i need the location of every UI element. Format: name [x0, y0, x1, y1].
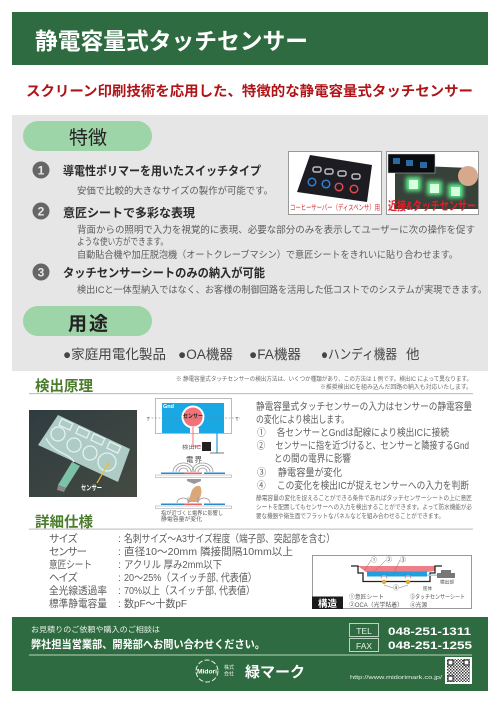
title banner [12, 12, 488, 65]
photo: proximity touch sensor [386, 152, 478, 214]
text block: detection principle note: 要な機器や衛生面でフラットなパネルなどを組み合わせることができます。 [256, 511, 444, 520]
feature 1: 導電性ポリマーを用いたスイッチタイプ [63, 163, 261, 178]
text block: detection principle: の変化により検出します。 [256, 413, 349, 426]
heading: features: 特徴 [69, 127, 107, 149]
note: ※推奨検出ICを組み込んだ回路の納入も対応いたします。 [320, 383, 472, 391]
feature 2: 自動貼合機や加圧脱泡機（オートクレーブマシン）で意匠シートをきれいに貼り合わせます。 [77, 249, 458, 261]
photo: film touch sensor: センサー [81, 484, 102, 492]
text block: detection principle: ③ 静電容量が変化 [257, 466, 342, 479]
feature 2: 意匠シートで多彩な表現 [63, 205, 195, 220]
feature 1 [32, 162, 273, 197]
footer: company logo: 株式 [224, 664, 234, 671]
text block: detection principle: ④ この変化を検出ICが捉えセンサーへの入力を判断 [257, 479, 469, 492]
diagram: finger near sensor: 指が近づくと電界に影響し [161, 509, 223, 517]
spec table: センサー [49, 546, 87, 558]
text block: detection principle: 静電容量式タッチセンサーの入力はセンサーの静電容量 [256, 400, 472, 413]
structure diagram: ③タッチセンサーシート [410, 593, 465, 601]
applications list: ●FA機器 [249, 347, 301, 362]
text block: detection principle [256, 400, 472, 492]
structure diagram: ①意匠シート [349, 593, 384, 601]
diagram: finger near sensor: 静電容量が変化 [161, 515, 203, 523]
structure diagram: ②OCA（光学粘着） [349, 601, 403, 609]
text block: detection principle note: 静電容量の変化を捉えることができる条件であればタッチセンサーシートの上に意匠 [256, 493, 472, 502]
text block: detection principle: との間の電界に影響 [274, 452, 351, 465]
structure diagram: ④ [393, 584, 399, 592]
spec table: 70%以上（スイッチ部, 代表値） [124, 584, 255, 597]
diagram: detection electrode layout: 検出IC [182, 444, 201, 451]
diagram: detection electrode layout: T [235, 417, 239, 423]
spec table: 直径10～20mm 隣接間隔10mm以上 [124, 545, 293, 558]
feature 3: タッチセンサーシートのみの納入が可能 [63, 265, 265, 280]
structure diagram: ③ [400, 556, 406, 564]
spec table: サイズ [49, 532, 78, 545]
footer: contact: 弊社担当営業部、開発部へお問い合わせください。 [31, 637, 265, 651]
subtitle: スクリーン印刷技術を応用した、特徴的な静電容量式タッチセンサー [26, 82, 473, 100]
spec table: アクリル 厚み2mm以下 [124, 559, 222, 571]
spec table: 全光線透過率 [49, 584, 107, 597]
footer: company logo: Midori [197, 668, 217, 676]
applications list: ●OA機器 [178, 347, 233, 362]
feature 3: 3 [38, 266, 45, 280]
footer: contact: お見積りのご依頼や購入のご相談は [31, 624, 161, 634]
footer: website url: http://www.midorimark.co.jp/ [350, 675, 442, 681]
feature 1: 安価で比較的大きなサイズの製作が可能です。 [77, 185, 273, 197]
title banner: 静電容量式タッチセンサー [35, 28, 308, 54]
feature 2: 2 [38, 204, 45, 218]
diagram: detection electrode layout: T [146, 417, 150, 423]
feature 2 [32, 202, 475, 261]
spec table: : [118, 533, 121, 545]
diagram: detection electrode layout: センサー [183, 413, 203, 420]
text block: detection principle: ① 各センサーとGndは配線により検出ICに接続 [257, 426, 449, 439]
applications list: ●家庭用電化製品 [63, 346, 166, 362]
photo: coffee server sensor panel: コーヒーサーバー（ディスペンサ）用 [290, 202, 380, 212]
structure diagram: 検出部 [440, 578, 455, 586]
structure diagram: ① [371, 556, 377, 564]
applications list: ●ハンディ機器 [321, 346, 397, 362]
footer: contact [12, 617, 488, 691]
note [176, 375, 472, 391]
feature 3: 検出ICと一体型納入ではなく、お客様の制御回路を活用した低コストでのシステムが実現できます。 [77, 284, 487, 296]
structure diagram: ② [386, 556, 392, 564]
footer: contact: TEL [356, 626, 372, 636]
structure diagram: 筐体 [423, 585, 432, 592]
feature 2: 背面からの照明で入力を視覚的に表現、必要な部分のみを表示してユーザーに次の操作を促す [77, 224, 475, 236]
spec table: 名刺サイズ～A3サイズ程度（端子部、突起部を含む） [124, 532, 335, 545]
diagram: electric field [156, 455, 232, 478]
feature 2: ような使い方ができます。 [77, 236, 168, 248]
diagram: detection electrode layout [146, 398, 240, 453]
spec table: : [118, 572, 121, 584]
feature 1: 1 [38, 164, 45, 178]
arrow: down [187, 479, 201, 484]
diagram: detection electrode layout: Gnd [163, 404, 174, 410]
spec table: : [118, 559, 121, 571]
structure diagram: ④光源 [410, 601, 427, 609]
footer: company logo: 会社 [224, 670, 234, 678]
heading: applications: 用途 [68, 313, 108, 335]
text block: detection principle note [256, 493, 472, 520]
photo: coffee server sensor panel [288, 152, 382, 214]
diagram: finger near sensor [156, 486, 232, 523]
spec table: : [118, 585, 121, 597]
footer: contact: 048-251-1255 [388, 640, 472, 652]
note: ※ 静電容量式タッチセンサーの検出方法は、いくつか種類があり、この方法は 1 例です。検出IC によって異なります。 [176, 375, 472, 383]
applications list: 他 [406, 347, 420, 362]
heading: features [23, 121, 152, 151]
spec table: 意匠シート [49, 559, 92, 571]
structure diagram: 構造 [318, 598, 337, 610]
diagram: electric field: 電界 [186, 455, 202, 464]
footer: company logo: 緑マーク [245, 663, 305, 681]
spec table: ヘイズ [49, 571, 78, 584]
footer: contact: FAX [356, 641, 372, 651]
structure diagram [312, 556, 472, 610]
heading: applications [23, 306, 152, 336]
spec table: 標準静電容量 [49, 597, 107, 610]
heading: detection principle: 検出原理 [35, 378, 94, 395]
applications list [63, 346, 420, 362]
panel: features and applications background [12, 115, 488, 371]
spec table: 数pF～十数pF [124, 597, 187, 610]
heading: detailed specifications: 詳細仕様 [35, 513, 94, 531]
spec table: : [118, 546, 121, 558]
feature 3 [32, 264, 487, 296]
qr code [445, 657, 472, 684]
spec table [49, 532, 335, 610]
footer: company logo [196, 660, 305, 682]
spec table: 20～25%（スイッチ部, 代表値） [124, 571, 257, 584]
footer: contact: 048-251-1311 [388, 626, 471, 638]
photo: film touch sensor [29, 410, 137, 497]
spec table: : [118, 598, 121, 610]
